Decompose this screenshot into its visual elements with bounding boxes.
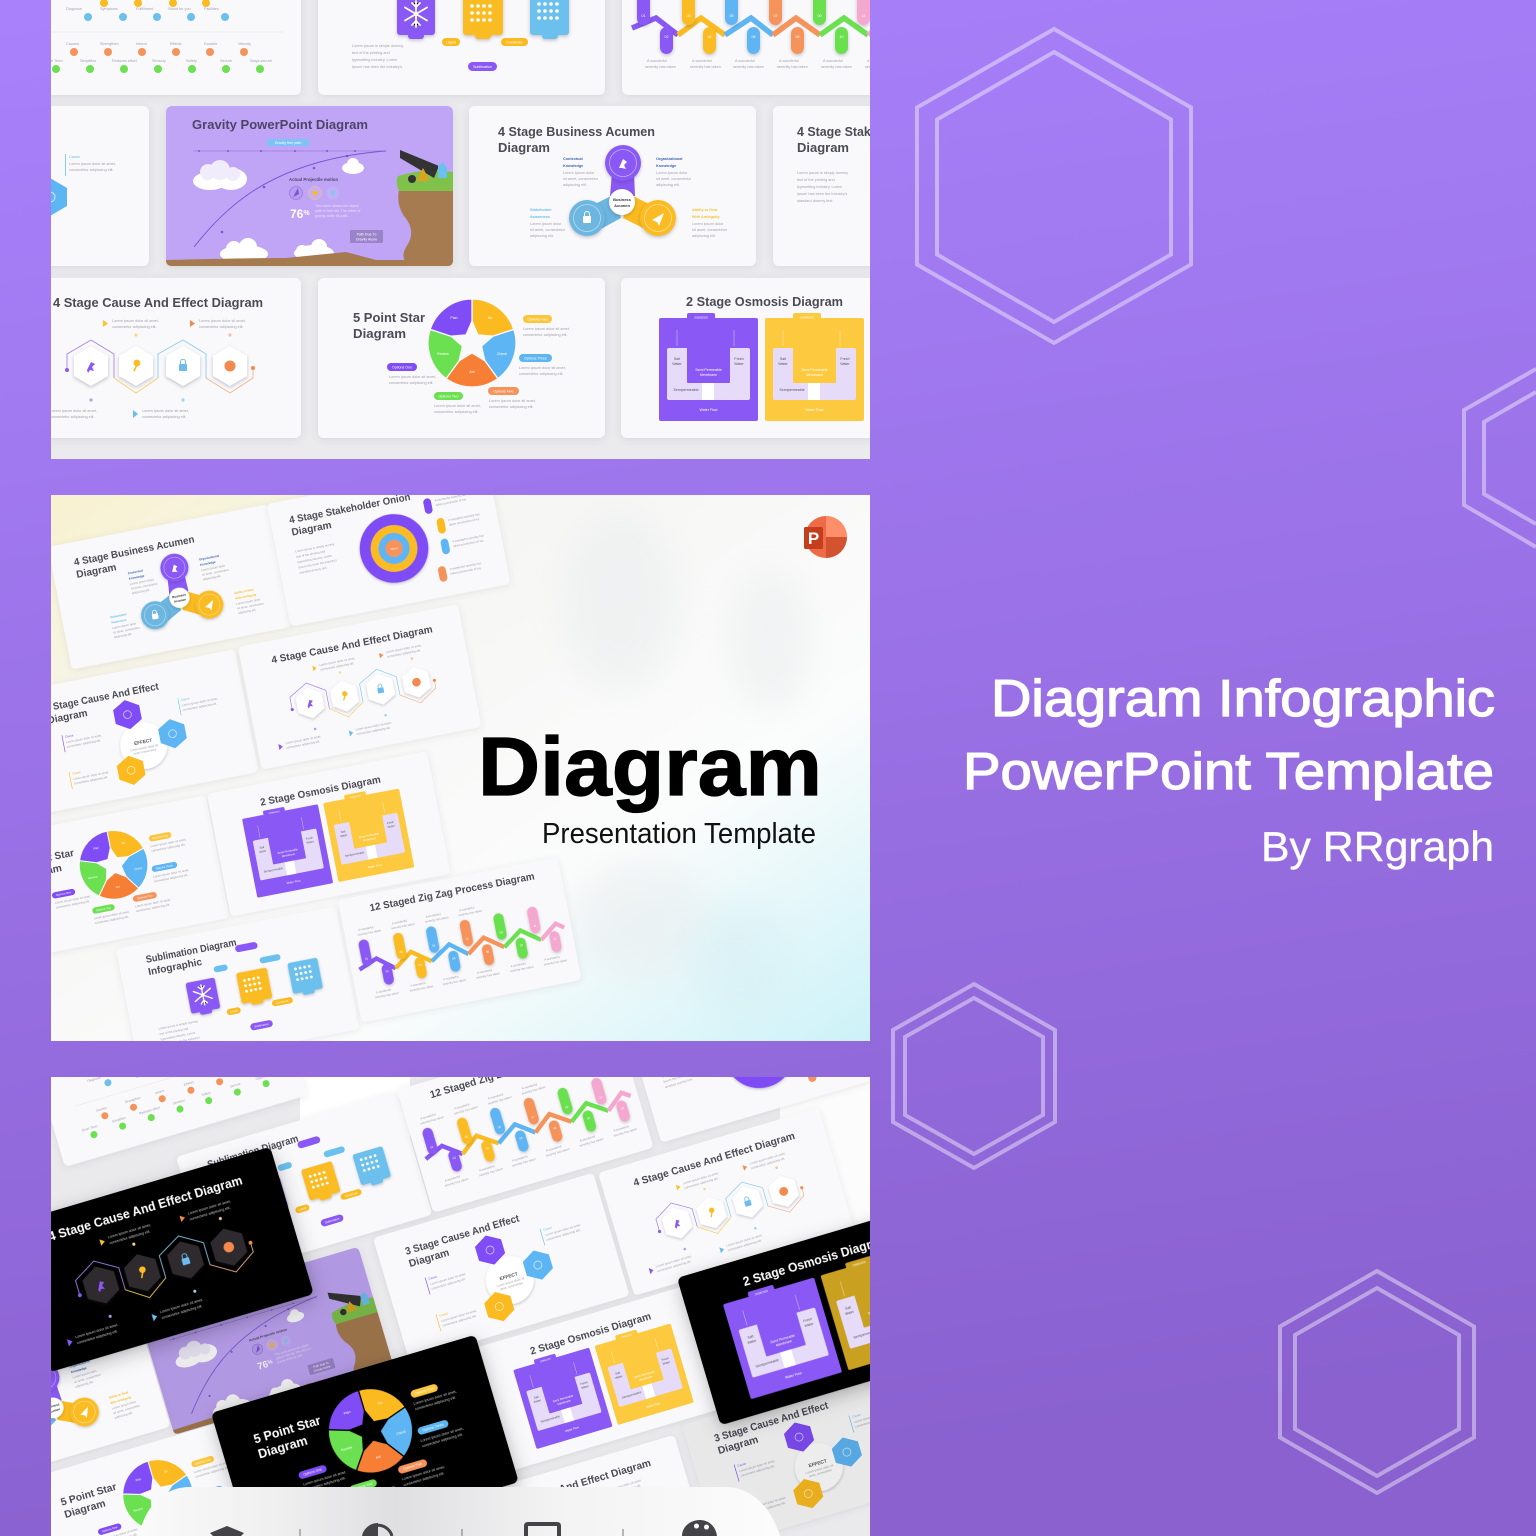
tilted slide: 4 stage cause and effect: [238, 604, 482, 770]
panel: presentation cover: [51, 495, 870, 1041]
icon: tablet: [526, 1524, 559, 1536]
icon: graduation cap: [210, 1526, 244, 1536]
byline: By RRgraph: [1261, 823, 1494, 870]
slide: stakeholder onion: [773, 106, 1060, 266]
slide: gravity: [166, 106, 453, 266]
slide: stage dots: [14, 0, 301, 95]
hexagon outline: top centre: [917, 29, 1191, 343]
tilted slide: stakeholder onion: [267, 461, 511, 627]
panel: angled slide collage: [51, 1077, 870, 1536]
angled slide: sublimation: [176, 1092, 432, 1280]
angled slide: five point star: [25, 1415, 281, 1536]
panel: slide grid preview: [51, 0, 870, 459]
angled slide: 3 stage cause lower right: [682, 1360, 938, 1536]
dark slide: five point star: [211, 1335, 519, 1536]
slide: five point star: [318, 278, 605, 438]
icon: palette: [682, 1520, 717, 1536]
divider marks: [300, 1529, 623, 1536]
angled slide: stakeholder onion: [625, 955, 881, 1143]
slide: cause and effect: [14, 278, 301, 438]
tilted slide: business acumen: [48, 504, 292, 670]
hexagon outline: lower centre: [893, 984, 1055, 1168]
slide: sublimation: [318, 0, 605, 95]
hexagon outline: right edge: [1464, 369, 1536, 547]
tilted slide: osmosis: [207, 751, 451, 917]
angled slide: business acumen: [0, 1304, 170, 1492]
dark slide: osmosis: [677, 1200, 985, 1425]
angled slide: 3 stage cause and effect: [373, 1173, 629, 1361]
tilted slide: sublimation: [116, 906, 360, 1072]
slide: zig zag: [622, 0, 909, 95]
angled slide: zig zag: [397, 1025, 653, 1213]
title line 2: PowerPoint Template: [963, 743, 1494, 801]
angled slide: stage dots: [25, 960, 307, 1167]
icon: pie chart: [362, 1523, 378, 1536]
tilted slide: 3 stage cause and effect: [15, 649, 259, 815]
angled slide: gravity: [138, 1247, 394, 1435]
icon: PowerPoint logo: P: [808, 529, 819, 548]
title line 1: Diagram Infographic: [991, 670, 1495, 728]
hexagon outline: bottom right: [1280, 1271, 1474, 1493]
angled slide: osmosis: [475, 1283, 731, 1471]
slide: business acumen: [469, 106, 756, 266]
angled slide: 4 stage cause and effect: [598, 1108, 854, 1296]
icon: PowerPoint logo: [804, 516, 847, 558]
tilted slide: zig zag: [338, 857, 582, 1023]
cover subheading: Presentation Template: [542, 818, 816, 850]
feature toolbar: [139, 1487, 780, 1536]
dark slide: cause and effect: [6, 1147, 314, 1372]
icon: pie chart ring: [364, 1525, 392, 1536]
slide: osmosis: [621, 278, 908, 438]
tilted slide: five point star: [0, 795, 230, 961]
angled slide: cause and effect lower: [454, 1435, 710, 1536]
cover heading: Diagram: [478, 720, 822, 813]
slide: 3 stage cause and effect: [0, 106, 149, 266]
